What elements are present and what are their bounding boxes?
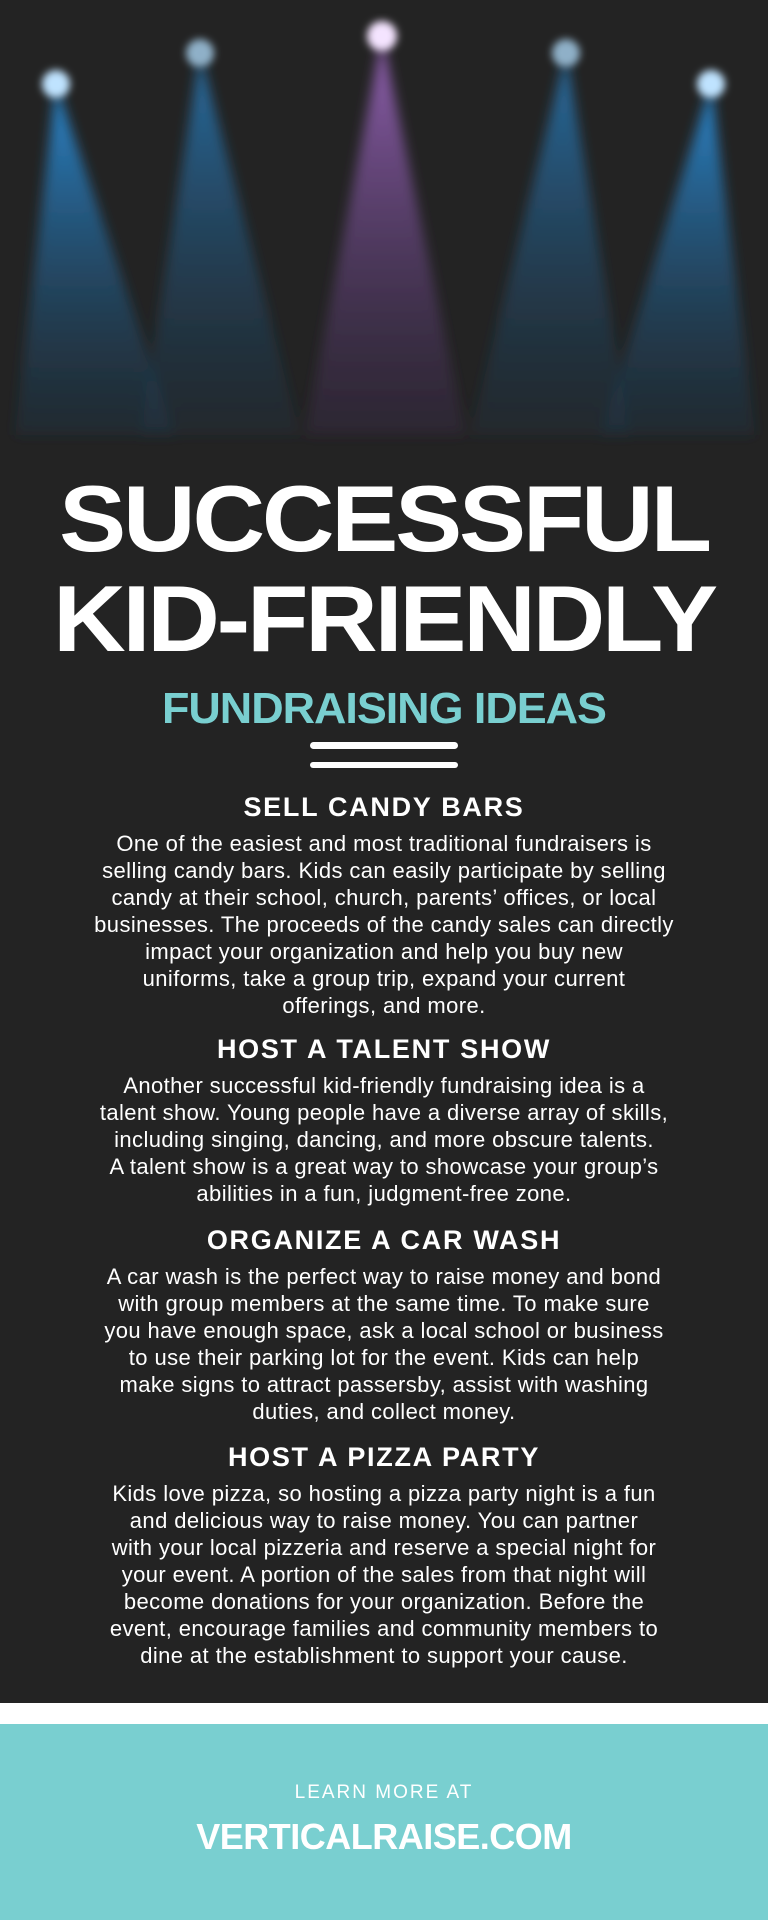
section: host a talent show: including singing, dancing, and more obscure talents. — [114, 1127, 654, 1152]
section: host a talent show: talent show. Young people have a diverse array of skills, — [100, 1100, 668, 1125]
white strip — [0, 1703, 768, 1724]
section: host a talent show: HOST A TALENT SHOW — [217, 1034, 551, 1064]
section: host a pizza party: event, encourage families and community members to — [110, 1616, 658, 1641]
section: organize a car wash: ORGANIZE A CAR WASH — [207, 1225, 561, 1255]
section: organize a car wash: A car wash is the perfect way to raise money and bond — [107, 1264, 661, 1289]
section: host a talent show: abilities in a fun, judgment-free zone. — [196, 1181, 572, 1206]
section: sell candy bars: uniforms, take a group trip, expand your current — [143, 966, 625, 991]
spotlights background — [16, 14, 754, 438]
section: organize a car wash: make signs to attract passersby, assist with washing — [119, 1372, 649, 1397]
divider lines — [310, 742, 458, 768]
section: host a pizza party: with your local pizzeria and reserve a special night for — [112, 1535, 656, 1560]
section: host a pizza party: and delicious way to raise money. You can partner — [130, 1508, 638, 1533]
section: host a pizza party: your event. A portion of the sales from that night will — [122, 1562, 646, 1587]
section: host a pizza party: HOST A PIZZA PARTY — [228, 1442, 540, 1472]
title: FUNDRAISING IDEAS — [162, 684, 606, 733]
section: host a pizza party: become donations for your organization. Before the — [124, 1589, 644, 1614]
section: host a pizza party — [110, 1442, 658, 1668]
section: organize a car wash: to use their parking lot for the event. Kids can help — [129, 1345, 639, 1370]
section: organize a car wash: with group members at the same time. To make sure — [118, 1291, 650, 1316]
section: sell candy bars: selling candy bars. Kids can easily participate by selling — [102, 858, 666, 883]
section: host a talent show: Another successful kid-friendly fundraising idea is a — [123, 1073, 645, 1098]
section: organize a car wash: you have enough space, ask a local school or business — [104, 1318, 664, 1343]
title: SUCCESSFUL — [59, 466, 709, 571]
section: sell candy bars: businesses. The proceeds of the candy sales can directly — [94, 912, 674, 937]
section: organize a car wash: duties, and collect money. — [252, 1399, 516, 1424]
section: sell candy bars — [94, 792, 674, 1018]
footer: VERTICALRAISE.COM — [196, 1816, 572, 1857]
title — [53, 466, 716, 733]
section: organize a car wash — [104, 1225, 664, 1424]
footer: LEARN MORE AT — [295, 1782, 473, 1803]
section: sell candy bars: impact your organization and help you buy new — [145, 939, 623, 964]
section: host a talent show: A talent show is a great way to showcase your group’s — [109, 1154, 659, 1179]
section: host a talent show — [100, 1034, 668, 1206]
title: KID-FRIENDLY — [53, 566, 715, 671]
section: host a pizza party: Kids love pizza, so hosting a pizza party night is a fun — [112, 1481, 656, 1506]
footer — [0, 1724, 768, 1920]
section: sell candy bars: One of the easiest and most traditional fundraisers is — [116, 831, 652, 856]
section: sell candy bars: candy at their school, church, parents’ offices, or local — [112, 885, 656, 910]
section: sell candy bars: SELL CANDY BARS — [243, 792, 525, 822]
section: sell candy bars: offerings, and more. — [282, 993, 486, 1018]
section: host a pizza party: dine at the establishment to support your cause. — [140, 1643, 628, 1668]
